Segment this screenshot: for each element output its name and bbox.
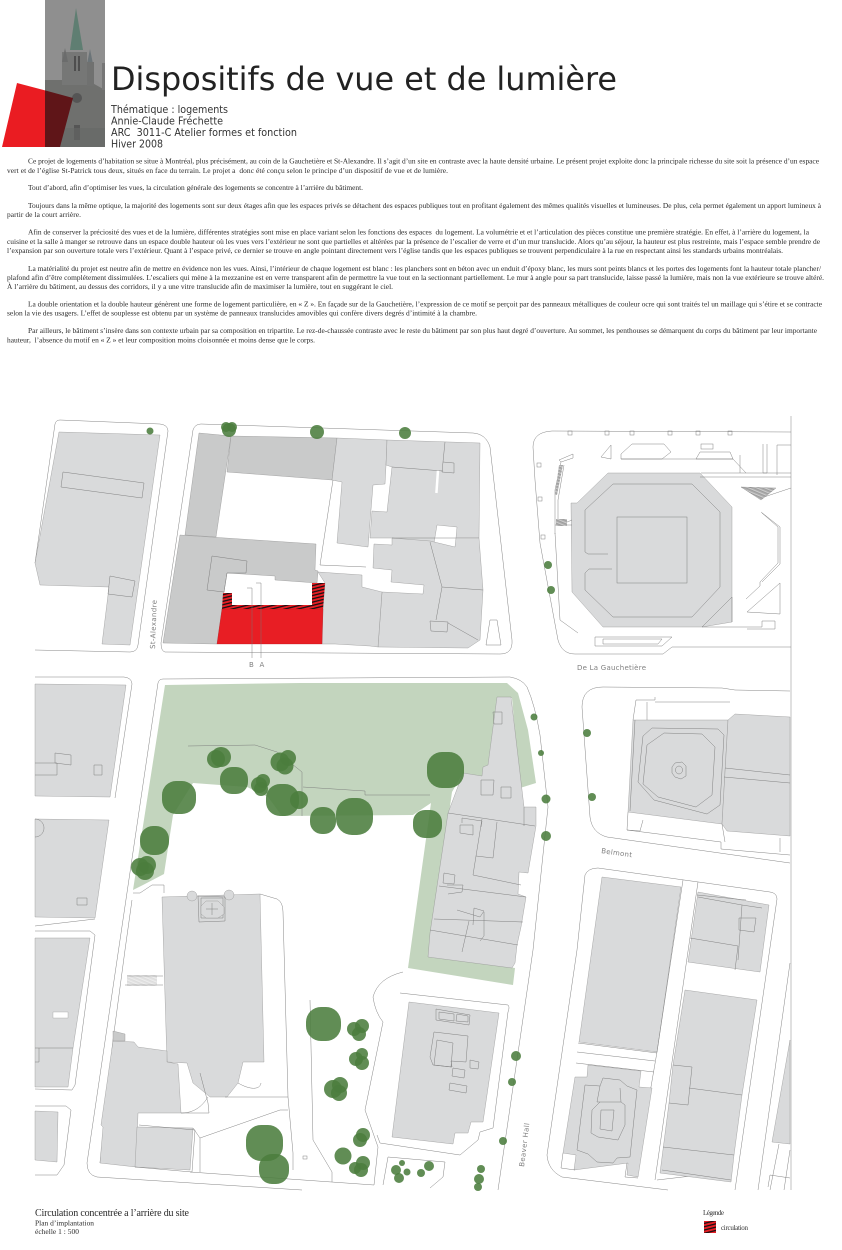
stadium block (486, 431, 791, 654)
map frame line (790, 416, 792, 1190)
subtitle block: Annie-Claude Fréchette (111, 114, 223, 128)
body text: partir de la court arrière. (7, 210, 81, 219)
church St-Patrick (162, 890, 264, 1097)
buildings: west column (35, 677, 132, 1175)
park and road outlines (158, 677, 548, 1190)
circulation hatch (222, 583, 325, 609)
caption: Plan d’implantation (35, 1218, 94, 1228)
block: west of St-Alexandre (35, 420, 168, 652)
legend (703, 1209, 748, 1233)
title: Dispositifs de vue et de lumière (111, 60, 617, 98)
body text: À l’arrière du bâtiment, au dessus des corridors, il y a une vitre translucide afin de maximiser la lumière, tout en suggérant le ciel. (7, 281, 393, 291)
trees (131, 422, 596, 1191)
body text: plafond afin d’être complétement dissimulées. L’escaliers qui mène à la mezzanine est en verre transparent afin de permettre la vue tout en la sectionnant partiellement. Le mur à angle pour sa part translucide, laisse passé la lumière, mais non la vue extérieure se trouve altéré. (7, 273, 824, 282)
building: middle south block (377, 993, 509, 1155)
section marks B A: B (249, 661, 254, 669)
subtitle block: Thématique : logements (110, 103, 228, 116)
subtitle block (110, 103, 297, 150)
body text: La matérialité du projet est neutre afin de mettre en évidence non les vues. Ainsi, l’intérieur de chaque logement est blanc : les planchers sont en béton avec un enduit d’époxy blanc, les murs sont peints blancs et les portes des logements font la hauteur totale plancher/ (28, 264, 822, 273)
caption: échelle 1 : 500 (35, 1227, 79, 1236)
subtitle block: ARC 3011-C Atelier formes et fonction (111, 126, 297, 139)
red translucent square (2, 83, 73, 147)
street label Belmont: Belmont (601, 847, 633, 859)
body text: Toujours dans la même optique, la majorité des logements sont sur deux étages afin que les espaces privés se détachent des espaces publiques tout en profitant également des mêmes qualités visuelles et lumineuses. De plus, cela permet également un apport lumineux à (28, 201, 822, 210)
body text: selon la vie des usagers. L’effet de souplesse est obtenu par un système de panneaux translucides amovibles qui confère divers degrés d’intimité à la chambre. (7, 308, 477, 318)
body text: hauteur, l’absence du motif en « Z » et leur composition moins cloisonnée et moins dense que le corps. (7, 336, 315, 344)
street label St-Alexandre: St-Alexandre (149, 600, 159, 649)
section marks B A: A (260, 661, 264, 669)
body text: Ce projet de logements d’habitation se situe à Montréal, plus précisément, au coin de la Gauchetière et St-Alexandre. Il s’agit d’un site en contraste avec la haute densité urbaine. Le présent projet exploite donc la principale richesse du site soit la présence d’un espace (28, 156, 820, 166)
body text: La double orientation et la double hauteur génèrent une forme de logement particulière, en « Z ». En façade sur de la Gauchetière, l’expression de ce motif se perçoit par des panneaux métalliques de couleur ocre qui sont traités tel un maillage qui s’étire et se contracte (28, 300, 823, 308)
block: project site (161, 424, 512, 654)
caption: Circulation concentrée a l’arrière du site (35, 1208, 190, 1219)
body text: Par ailleurs, le bâtiment s’insère dans son contexte urbain par sa composition en tripartite. Le rez-de-chaussée contraste avec le reste du bâtiment par son plus haut degré d’ouverture. Au sommet, les penthouses se démarquent du corps du bâtiment par leur importante (28, 326, 818, 335)
legend: circulation (721, 1224, 748, 1232)
subtitle block: Hiver 2008 (111, 138, 163, 150)
photo: Saint-Patrick church (45, 0, 105, 147)
buildings: east column (547, 687, 790, 1190)
legend: Légende (703, 1209, 724, 1217)
body text: cuisine et la salle à manger se retrouve dans un espace double hauteur où les vues vers l’extérieur ne sont que partielles et altérées par la présence de l’escalier de verre et d’un mur translucide. Alors qu’au séjour, la hauteur est plus restreinte, mais l’espace semble prendre de (7, 237, 821, 246)
body text: l’expansion par son ouverture totale vers l’extérieur. Quant à l’espace privé, ce dernier se trouve en angle pointant directement vers l’église tandis que les espaces publiques se trouvent perpendiculaire à la rue en respectant ainsi les standards urbains montréalais. (7, 246, 783, 255)
park paths (188, 745, 430, 816)
red project building (217, 609, 323, 644)
buildings: east of park (428, 697, 536, 968)
body text: Tout d’abord, afin d’optimiser les vues, la circulation générale des logements se concentre à l’arrière du bâtiment. (28, 183, 363, 192)
caption (35, 1208, 190, 1236)
body text (7, 156, 824, 344)
legend swatch: circulation (704, 1221, 716, 1233)
body text: Afin de conserver la préciosité des vues et de la lumière, différentes stratégies sont mise en place variant selon les fonctions des espaces du logement. La volumétrie et et l’articulation des pièces constitue une première stratégie. En effet, à l’arrière du logement, la (28, 228, 810, 236)
body text: vert et de l’église St-Patrick tous deux, situés en face du terrain. Le projet a donc été conçu selon le principe d’un dispositif de vue et de lumière. (7, 166, 448, 175)
buildings: south-west of church (100, 1031, 195, 1172)
park lawn (133, 683, 536, 985)
section marks B A (247, 583, 264, 669)
street label De La Gauchetière: De La Gauchetière (577, 664, 646, 672)
street label Beaver Hall: Beaver Hall (518, 1123, 531, 1167)
site plan (35, 416, 791, 1191)
